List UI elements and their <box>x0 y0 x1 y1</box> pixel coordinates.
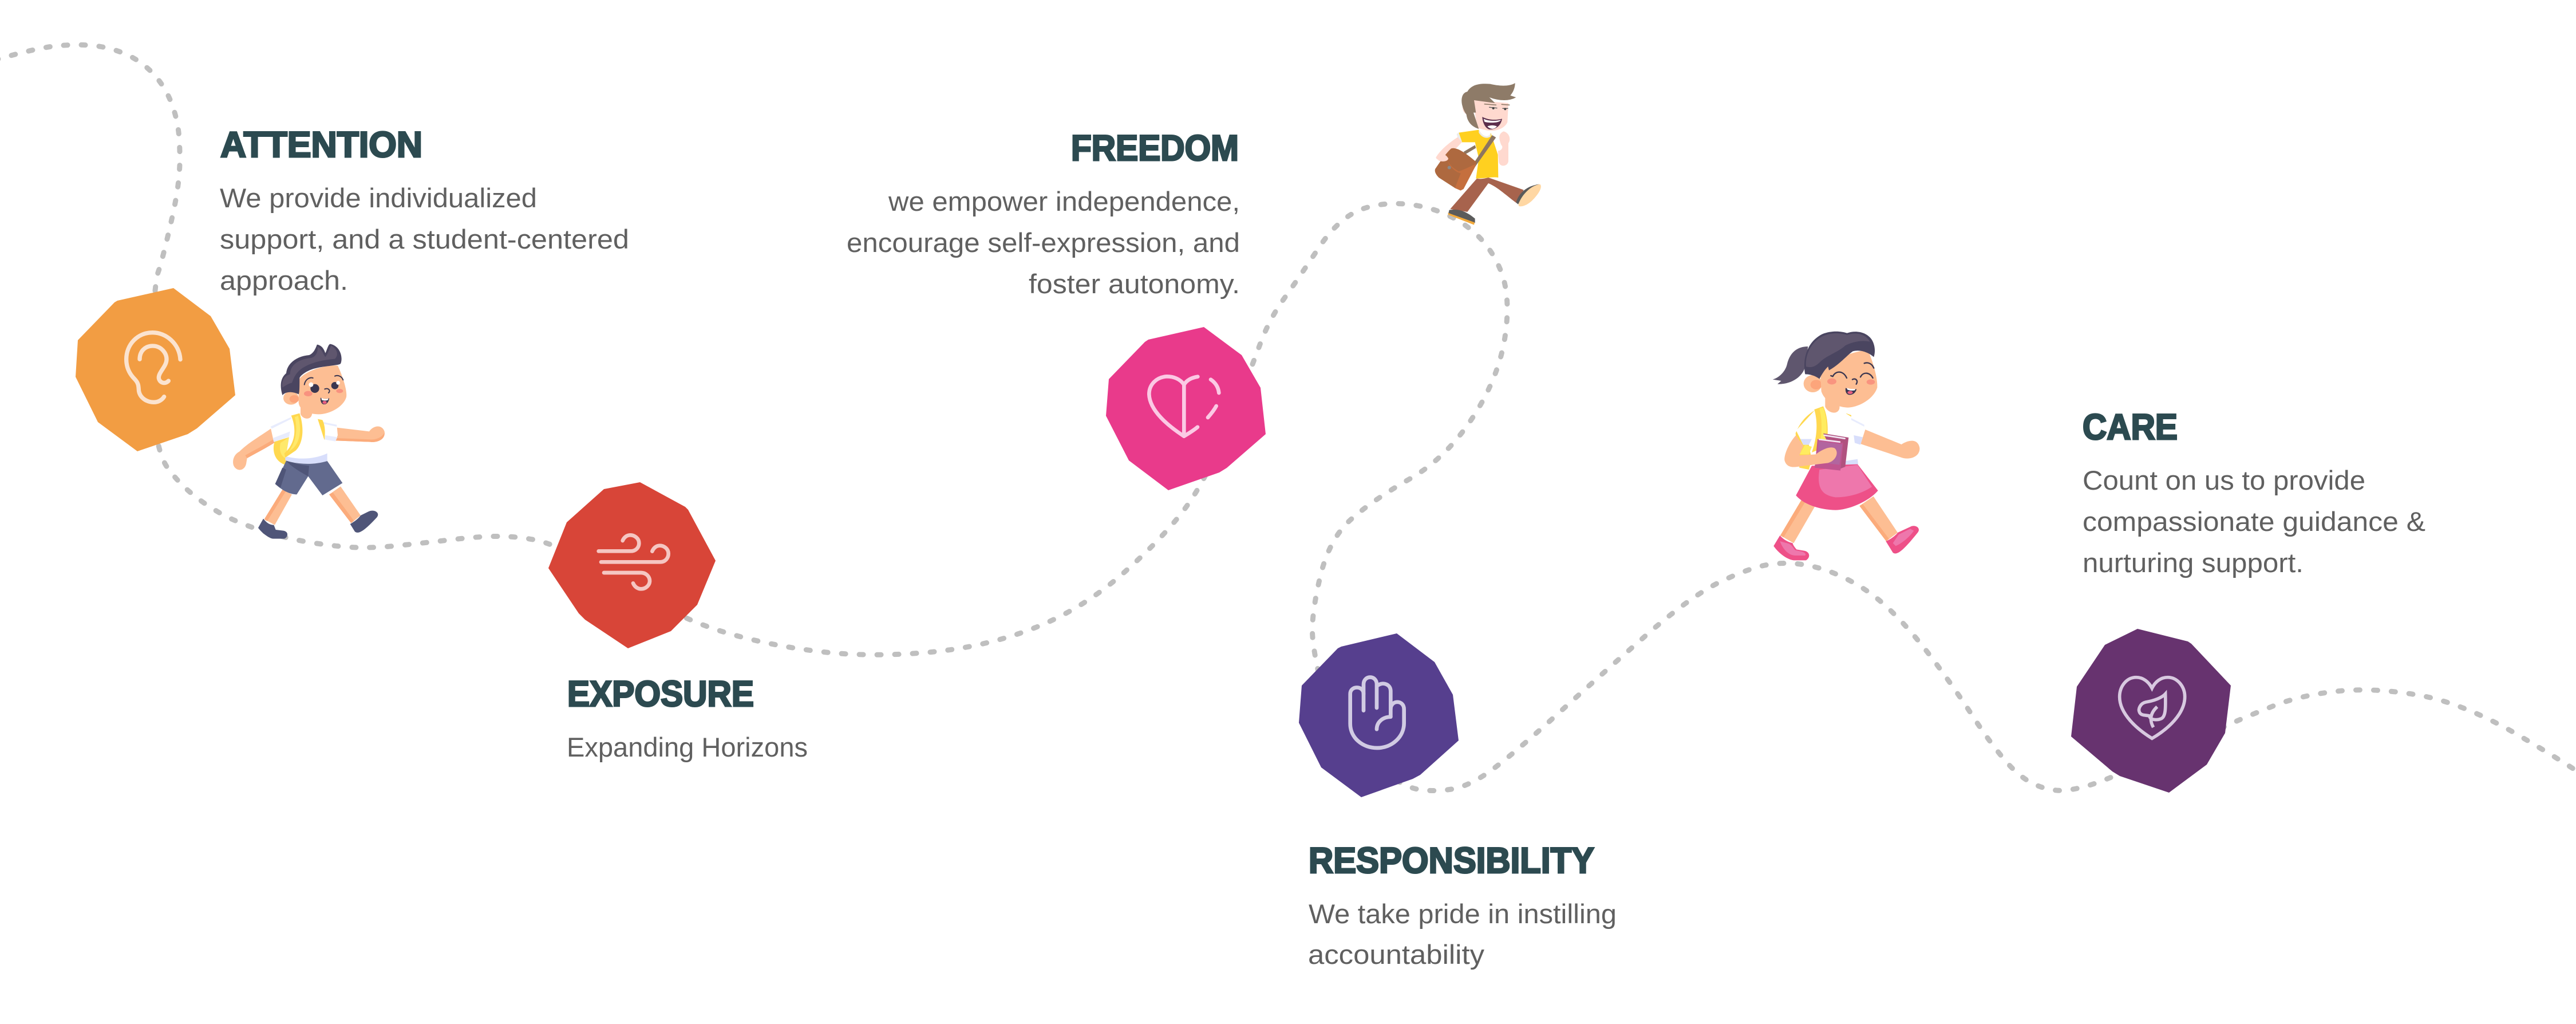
illustration: walking boy <box>233 344 385 539</box>
description: responsibility <box>1308 899 1617 970</box>
text block: care <box>2083 407 2425 578</box>
icon: raised hand <box>1350 677 1404 748</box>
badge: attention <box>76 288 235 451</box>
description: freedom: foster autonomy. <box>1029 269 1240 299</box>
illustration: walking girl with books <box>1773 332 1919 560</box>
illustration: running man with satchel <box>1435 83 1541 225</box>
description: care: compassionate guidance & <box>2083 506 2425 537</box>
description: freedom: we empower independence, <box>888 186 1240 216</box>
description: attention: approach. <box>220 265 348 296</box>
description: care: Count on us to provide <box>2083 465 2365 495</box>
description: exposure: Expanding Horizons <box>567 732 808 762</box>
icon: half heart <box>1149 376 1219 436</box>
description: freedom <box>847 186 1240 299</box>
icon: heart with leaf <box>2120 678 2185 738</box>
heading: attention: ATTENTION <box>220 125 422 165</box>
badge: responsibility <box>1299 633 1459 797</box>
description: responsibility: We take pride in instilling <box>1309 899 1617 929</box>
icon: ear <box>127 333 180 402</box>
description: freedom: encourage self-expression, and <box>847 227 1240 258</box>
text block: freedom <box>847 128 1240 299</box>
heading: freedom: FREEDOM <box>1071 128 1239 168</box>
heading: care: CARE <box>2083 407 2178 447</box>
text block: responsibility <box>1308 841 1617 970</box>
description: attention: support, and a student-centered <box>220 224 629 254</box>
badge: care <box>2071 629 2231 793</box>
description: attention <box>220 183 629 296</box>
icon: wind <box>599 535 669 589</box>
text block: exposure <box>567 674 808 762</box>
heading: responsibility: RESPONSIBILITY <box>1309 841 1594 881</box>
heading: exposure: EXPOSURE <box>567 674 754 714</box>
description: attention: We provide individualized <box>220 183 537 213</box>
badge: freedom <box>1106 327 1266 490</box>
description: care <box>2083 465 2425 578</box>
text block: attention <box>220 125 629 296</box>
dashed journey path <box>0 45 2576 790</box>
badge: exposure <box>548 482 716 648</box>
description: care: nurturing support. <box>2083 548 2304 578</box>
description: responsibility: accountability <box>1308 939 1485 970</box>
